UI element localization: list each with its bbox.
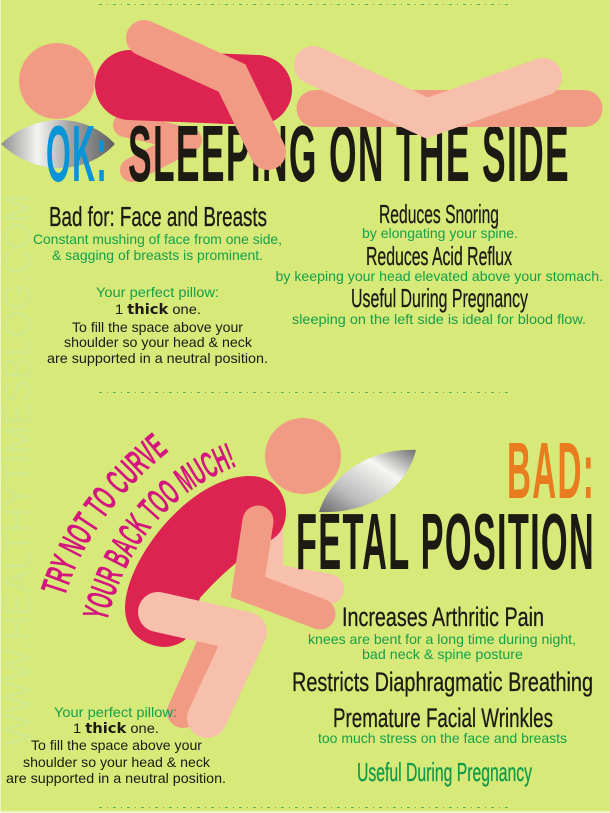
text: benefits of side sleeping (276, 199, 603, 327)
text: benefits of side sleeping: by keeping your head elevated above your stomach. (276, 268, 603, 284)
text: harms of fetal position: too much stress on the face and breasts (318, 730, 567, 746)
text: perfect pillow, side sleeping: 1 thick one. (115, 301, 201, 318)
torso (130, 85, 257, 90)
text: harms of fetal position: knees are bent for a long time during night, (308, 631, 576, 647)
text: benefits of side sleeping: Reduces Snoring (379, 199, 499, 229)
front leg (313, 65, 543, 118)
callout: try not to curve your back too much: YOUR BACK TOO MUCH! (82, 442, 236, 618)
text: bad for face and breasts (33, 201, 282, 263)
front arm (248, 521, 320, 614)
head (19, 43, 95, 119)
icon: silver leaf, side sleeping (1, 120, 115, 168)
front arm (144, 38, 268, 152)
text: harms of fetal position (292, 602, 593, 787)
text: OK: (46, 109, 108, 198)
text: benefits of side sleeping: sleeping on the left side is ideal for blood flow. (292, 311, 586, 327)
callout: try not to curve your back too much: TRY NOT TO CURVE (40, 432, 169, 593)
text: perfect pillow, side sleeping: shoulder so your head & neck (64, 334, 253, 350)
text: perfect pillow, fetal position: 1 thick one. (73, 720, 159, 737)
text: perfect pillow, fetal position: are supported in a neutral position. (6, 770, 226, 786)
text: perfect pillow, fetal position: shoulder so your head & neck (23, 754, 211, 770)
head (265, 418, 341, 494)
figure: side sleeper (19, 38, 584, 152)
figure: fetal position (125, 418, 341, 718)
torso (125, 476, 286, 647)
rear arm (268, 530, 329, 589)
text: bad for face and breasts: & sagging of breasts is prominent. (52, 247, 263, 263)
text: perfect pillow, fetal position: Your perfect pillow: (54, 704, 177, 720)
icon: silver leaf, fetal position (319, 450, 416, 512)
text: perfect pillow, fetal position (6, 704, 226, 786)
text: harms of fetal position: Increases Arthritic Pain (342, 602, 544, 632)
figure: rear arm behind title (125, 125, 190, 170)
text: benefits of side sleeping: by elongating your spine. (362, 225, 518, 241)
text: perfect pillow, side sleeping: Your perfect pillow: (96, 284, 219, 300)
rear leg (183, 640, 215, 712)
text: perfect pillow, side sleeping: To fill the space above your (72, 319, 243, 335)
text: perfect pillow, side sleeping: are supported in a neutral position. (47, 350, 268, 366)
text: bad for face and breasts: Bad for: Face and Breasts (49, 201, 267, 232)
text: perfect pillow, side sleeping (47, 284, 268, 366)
text: bad for face and breasts: Constant mushing of face from one side, (33, 231, 282, 247)
front leg (158, 612, 247, 718)
text: benefits of side sleeping: Reduces Acid Reflux (366, 241, 512, 271)
text: perfect pillow, fetal position: To fill the space above your (31, 737, 202, 753)
text: harms of fetal position: bad neck & spine posture (362, 646, 523, 662)
back leg (315, 90, 584, 127)
